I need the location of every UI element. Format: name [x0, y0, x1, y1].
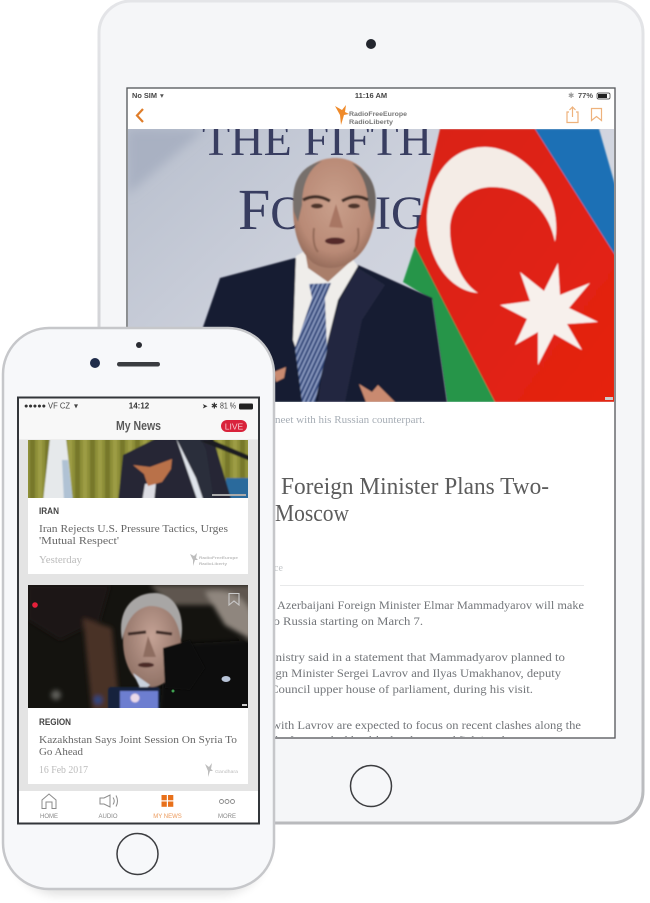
phone status bar: ➤ — [202, 404, 208, 410]
photo credit — [605, 397, 613, 400]
backdrop lettering: THE FIFTH — [202, 114, 435, 165]
card headline: Region: Kazakhstan Says Joint Session On Syria To — [39, 734, 238, 746]
RFE/RL logo: RadioLiberty — [349, 119, 393, 126]
article body: Azerbaijani Foreign Minister Elmar Mammadyarov will make — [277, 598, 584, 612]
phone speaker — [117, 362, 160, 366]
article body: to Russia starting on March 7. — [270, 614, 423, 628]
card date: Iran: Yesterday — [39, 555, 82, 566]
phone body — [3, 328, 274, 889]
live badge: LIVE — [225, 422, 244, 432]
phone status bar: VF CZ — [48, 402, 70, 410]
article body: Council upper house of parliament, during his visit. — [270, 682, 533, 696]
bookmark icon — [592, 108, 602, 120]
card source logo: Region — [205, 763, 239, 777]
backdrop lettering: IG — [375, 187, 426, 240]
Azerbaijan flag — [403, 129, 615, 402]
tie — [295, 283, 331, 402]
tablet status bar: ▾ — [160, 91, 164, 100]
card source logo: Iran — [190, 553, 239, 566]
hands — [274, 367, 286, 382]
card photo: Iran — [28, 440, 248, 498]
shirt — [293, 248, 358, 352]
phone header — [19, 398, 258, 440]
phone home button — [117, 834, 158, 874]
tablet status bar: No SIM — [132, 91, 157, 100]
card category: Region: REGION — [39, 717, 71, 728]
article body — [275, 601, 584, 737]
tab bar — [19, 791, 258, 822]
card source logo: Region: Gandhara — [215, 769, 239, 774]
phone status bar: 81 % — [220, 402, 236, 410]
card source logo: Iran: RadioFreeEurope — [199, 555, 239, 560]
card headline: Iran — [39, 523, 228, 547]
phone status bar: ✱ — [211, 402, 218, 410]
tab: audio — [98, 795, 118, 820]
card category: Iran: IRAN — [39, 506, 59, 517]
card photo: Region — [28, 585, 252, 712]
phone status bar: ●●●●● — [24, 403, 46, 410]
phone screen — [18, 398, 259, 824]
article photo — [127, 114, 615, 402]
screen title: My News — [116, 419, 161, 433]
article body: inistry said in a statement that Mammadyarov planned to — [272, 650, 565, 664]
RFE/RL logo — [335, 105, 407, 126]
tablet body — [99, 1, 643, 823]
phone camera — [90, 358, 100, 368]
suit — [195, 258, 447, 402]
phone front sensor — [136, 342, 142, 348]
bookmark icon on photo — [229, 594, 239, 605]
article headline: Foreign Minister Plans Two- — [281, 474, 549, 500]
live badge — [221, 420, 247, 432]
neck — [305, 255, 349, 282]
tab: my news — [153, 795, 182, 820]
tablet home button — [350, 766, 392, 806]
tablet camera — [366, 39, 376, 49]
head — [293, 158, 375, 268]
tab: home — [40, 794, 58, 820]
article body: with Lavrov are expected to focus on recent clashes along the — [272, 718, 581, 732]
tab: my news: MY NEWS — [153, 814, 182, 820]
phone status bar — [24, 402, 253, 410]
phone — [3, 328, 274, 889]
article headline — [276, 477, 548, 521]
source label: ce — [274, 563, 283, 574]
article headline: Moscow — [275, 501, 350, 527]
tablet status bar: 11:16 AM — [355, 91, 387, 100]
tablet status bar: 77% — [578, 91, 593, 100]
tab: audio: AUDIO — [98, 814, 118, 820]
article body: ign Minister Sergei Lavrov and Ilyas Umakhanov, deputy — [272, 666, 561, 680]
card headline: Iran: 'Mutual Respect' — [39, 535, 119, 547]
backdrop lettering: FO — [238, 177, 305, 242]
phone shadow — [12, 350, 267, 895]
backdrop lettering — [202, 129, 431, 230]
tab: home: HOME — [40, 814, 58, 820]
card headline: Region — [39, 734, 238, 758]
card date: Region: 16 Feb 2017 — [39, 765, 88, 776]
RFE/RL logo: RadioFreeEurope — [349, 111, 407, 118]
phone status bar: 14:12 — [129, 402, 150, 410]
tab: more — [218, 800, 236, 820]
news card: Region — [28, 585, 252, 784]
tablet status bar: ✱ — [568, 91, 575, 100]
tablet screen — [127, 88, 615, 738]
article text — [270, 414, 584, 747]
phone screen edge — [18, 398, 259, 824]
tablet screen edge — [127, 88, 615, 738]
minister figure — [195, 158, 447, 402]
tablet — [99, 1, 643, 823]
photo caption: neet with his Russian counterpart. — [275, 414, 425, 426]
photo backdrop — [127, 129, 615, 402]
card source logo: Iran: RadioLiberty — [199, 561, 228, 566]
share icon — [567, 107, 578, 122]
phone status bar: ▾ — [74, 402, 78, 410]
tab: more: MORE — [218, 814, 236, 820]
card headline: Iran: Iran Rejects U.S. Pressure Tactics, Urges — [39, 523, 228, 535]
hair — [293, 161, 322, 222]
tablet status bar — [132, 91, 610, 100]
article body: the front as the bloodshed and renewed fighting there — [272, 733, 522, 747]
back chevron — [137, 109, 143, 122]
card headline: Region: Go Ahead — [39, 746, 83, 758]
news card: Iran — [24, 436, 252, 574]
